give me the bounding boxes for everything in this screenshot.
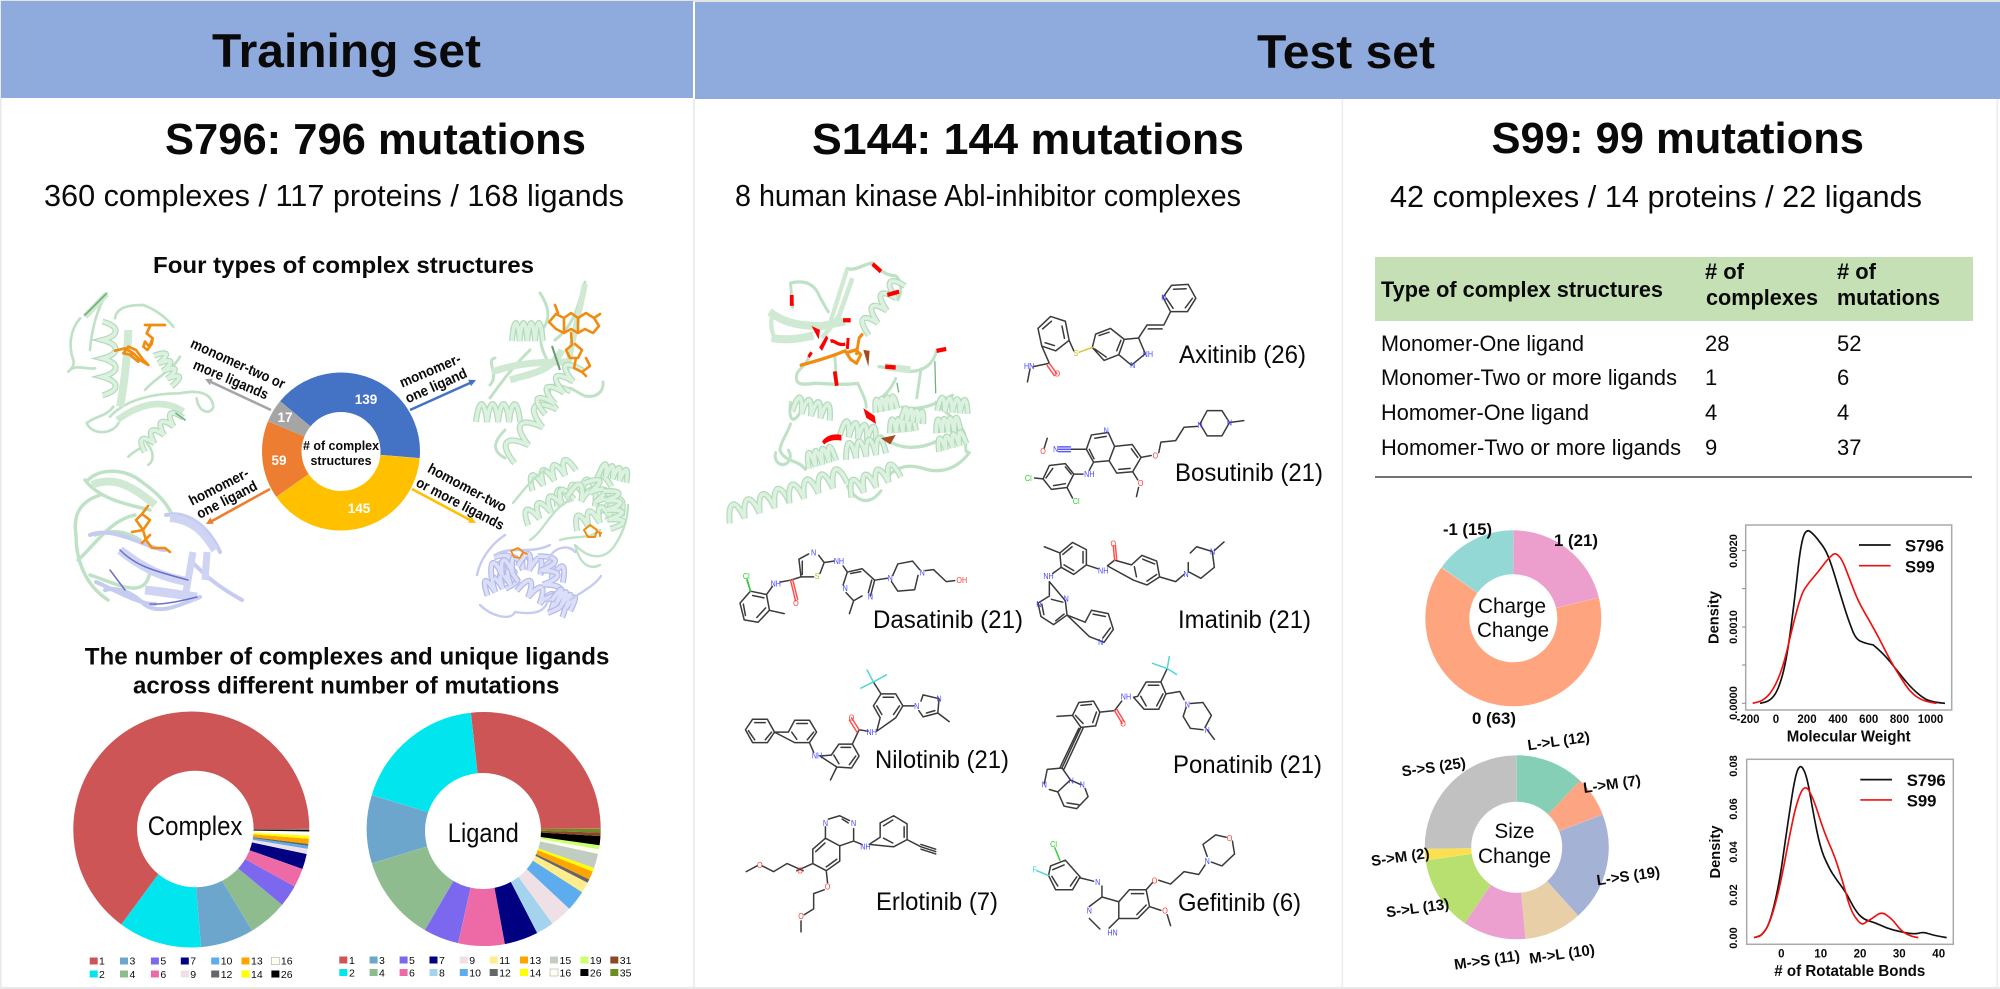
- donut chart: size change: L->S (19): [1596, 864, 1661, 889]
- legend: ligand: 8: [439, 968, 445, 980]
- molecule: Ponatinib: O: [1120, 719, 1126, 729]
- chart: rotatable bonds density: Density: [1707, 825, 1724, 878]
- heading: S796: S796: 796 mutations: [165, 116, 586, 164]
- molecule names: Nilotinib (21): [875, 746, 1009, 774]
- molecule: Axitinib: N: [1130, 361, 1135, 370]
- table: complex structure types: 4: [1837, 400, 1849, 425]
- molecule: Nilotinib: N: [914, 702, 919, 711]
- molecule: Ponatinib: N: [1069, 776, 1074, 786]
- table: complex structure types: # of: [1705, 259, 1745, 284]
- arrow: orange: [206, 489, 270, 524]
- molecule: Imatinib: N: [1064, 594, 1069, 604]
- legend: complex: [90, 956, 293, 981]
- legend: complex: 6: [160, 969, 166, 981]
- chart: rotatable bonds density: 0.00: [1728, 927, 1740, 949]
- molecule: Gefitinib: N: [1095, 878, 1100, 887]
- donut chart: size change: M->L (10): [1528, 942, 1596, 968]
- molecule: Dasatinib: N: [920, 568, 925, 578]
- molecule: Bosutinib: Cl: [1025, 473, 1032, 483]
- label: monomer-one ligand: monomer-: [397, 351, 464, 391]
- text: S796 counts: 360 complexes / 117 proteins / 168 ligands: [44, 179, 624, 213]
- molecule: Nilotinib: N: [936, 694, 942, 704]
- molecule: Imatinib: N: [1036, 600, 1041, 609]
- molecule names: [873, 341, 1323, 917]
- molecule: Bosutinib: Cl: [1073, 497, 1080, 506]
- legend: ligand: 13: [530, 955, 541, 967]
- molecule: Ponatinib: N: [1205, 726, 1210, 735]
- table: complex structure types: 28: [1705, 331, 1729, 356]
- molecule: Erlotinib: [746, 816, 936, 932]
- chart: molecular weight density: S796: [1905, 537, 1944, 556]
- table: complex structure types: 1: [1705, 365, 1717, 390]
- panel: training set S796: [44, 116, 632, 981]
- donut chart: size change: L->L (12): [1526, 729, 1591, 754]
- label: homomer-one ligand: homomer-: [187, 465, 252, 509]
- molecule: Gefitinib: O: [1227, 834, 1232, 843]
- molecule: Gefitinib: HN: [1107, 928, 1118, 938]
- chart: molecular weight density: 200: [1797, 714, 1817, 726]
- donut: number of complex structures: 59: [271, 453, 287, 468]
- donut chart: charge change: Charge: [1478, 595, 1546, 618]
- molecule: Ponatinib: NH: [1121, 692, 1131, 702]
- molecule: Bosutinib: N: [1104, 426, 1109, 436]
- chart: molecular weight density: 400: [1828, 714, 1848, 726]
- molecule: Nilotinib: NH: [867, 728, 877, 737]
- donut chart: size change: [1370, 729, 1661, 974]
- chart: molecular weight density: 800: [1890, 714, 1909, 726]
- donut chart: charge change: 0 (63): [1472, 709, 1516, 728]
- molecule: Bosutinib: O: [1138, 479, 1144, 488]
- legend: ligand: [339, 955, 632, 980]
- chart: rotatable bonds density: [1707, 755, 1953, 980]
- legend: ligand: 6: [409, 968, 415, 980]
- donut chart: complex: Complex: [148, 811, 243, 841]
- molecule: Dasatinib: N: [868, 592, 873, 601]
- header: Test set: [695, 2, 2000, 99]
- donut chart: charge change: Change: [1477, 619, 1549, 642]
- molecule names: Ponatinib (21): [1173, 751, 1322, 779]
- chart: molecular weight density: 600: [1859, 714, 1878, 726]
- text: S99 counts: 42 complexes / 14 proteins / 22 ligands: [1390, 180, 1922, 214]
- donut chart: charge change: 1 (21): [1554, 531, 1598, 550]
- molecule: Imatinib: N: [1210, 547, 1215, 557]
- chart: rotatable bonds density: 40: [1932, 948, 1945, 960]
- legend: complex: 7: [190, 956, 196, 968]
- legend: ligand: 3: [379, 955, 385, 967]
- legend: complex: 3: [130, 956, 136, 968]
- molecule names: Bosutinib (21): [1175, 459, 1323, 487]
- molecule: Dasatinib: N: [811, 548, 816, 557]
- molecule names: Imatinib (21): [1178, 606, 1311, 634]
- arrow: blue: [410, 380, 476, 410]
- donut chart: size change: Size: [1494, 820, 1534, 843]
- heading: number of complexes and unique ligands: The number of complexes and unique ligands: [85, 644, 609, 670]
- donut: number of complex structures: 145: [348, 501, 371, 516]
- table: complex structure types: 6: [1837, 365, 1849, 390]
- chart: rotatable bonds density: S99: [1907, 792, 1936, 811]
- table: complex structure types: Homomer-One ligand: [1381, 400, 1589, 425]
- legend: complex: 12: [221, 969, 233, 981]
- table: complex structure types: 9: [1705, 435, 1717, 460]
- molecule: Axitinib: N: [1161, 293, 1166, 303]
- legend: ligand: 31: [620, 955, 632, 967]
- label: monomer-two or more ligands: monomer-two or: [188, 336, 288, 393]
- chart: rotatable bonds density: 0: [1778, 948, 1785, 960]
- molecule: Erlotinib: O: [825, 882, 830, 891]
- legend: complex: 16: [281, 956, 293, 968]
- molecule: Gefitinib: O: [1162, 906, 1168, 916]
- table: complex structure types: Monomer-One ligand: [1381, 331, 1584, 356]
- molecule: Nilotinib: O: [849, 713, 854, 723]
- chart: molecular weight density: [1706, 525, 1952, 746]
- molecule: Dasatinib: O: [793, 599, 799, 608]
- legend: complex: 9: [190, 969, 196, 981]
- legend: complex: 5: [160, 956, 166, 968]
- molecule: Erlotinib: O: [757, 860, 763, 870]
- panel: test set S144: [725, 116, 1323, 938]
- molecule: Bosutinib: [1025, 411, 1244, 506]
- protein: homomer with two or more ligands: [477, 457, 630, 617]
- molecule: Axitinib: HN: [1024, 362, 1034, 371]
- legend: ligand: 10: [469, 968, 481, 980]
- donut chart: ligand: Ligand: [448, 818, 519, 848]
- molecule: Ponatinib: N: [1185, 700, 1190, 709]
- molecule: Ponatinib: [1042, 657, 1214, 809]
- molecule: Ponatinib: N: [1080, 780, 1085, 790]
- donut chart: size change: S->M (2): [1370, 845, 1431, 870]
- legend: complex: 26: [281, 969, 293, 981]
- molecule: Bosutinib: N: [1197, 420, 1203, 430]
- molecule: Imatinib: [1036, 539, 1224, 647]
- legend: ligand: 14: [530, 968, 541, 980]
- molecule: Gefitinib: N: [1087, 906, 1092, 916]
- molecule: Erlotinib: O: [798, 912, 804, 921]
- donut chart: size change: M->S (11): [1453, 948, 1521, 974]
- molecule: Imatinib: NH: [1043, 572, 1054, 581]
- molecule: Bosutinib: NH: [1084, 470, 1094, 479]
- donut chart: ligand: [401, 746, 566, 912]
- molecule: Axitinib: [1024, 284, 1196, 382]
- table: complex structure types: [1375, 257, 1973, 477]
- molecule: Dasatinib: N: [888, 574, 893, 583]
- legend: complex: 13: [251, 956, 263, 968]
- molecule: Gefitinib: N: [1205, 857, 1210, 866]
- molecule: Ponatinib: N: [1042, 780, 1047, 790]
- chart: molecular weight density: Density: [1706, 590, 1722, 644]
- chart: molecular weight density: 0.0000: [1728, 686, 1740, 720]
- arrow: gray: [205, 379, 271, 410]
- heading: four types of complex structures: Four types of complex structures: [153, 252, 534, 278]
- molecule: Imatinib: O: [1111, 539, 1116, 549]
- molecule: Dasatinib: NH: [771, 579, 781, 589]
- donut chart: size change: Change: [1478, 845, 1551, 868]
- protein: Abl kinase with mutation sites: [725, 263, 969, 523]
- legend: ligand: 26: [590, 968, 602, 980]
- donut chart: charge change: [1421, 520, 1605, 728]
- molecule: Erlotinib: NH: [860, 842, 871, 852]
- chart: molecular weight density: 0.0020: [1728, 534, 1740, 568]
- chart: rotatable bonds density: 0.02: [1728, 884, 1740, 906]
- molecule: Bosutinib: N: [1227, 418, 1232, 428]
- chart: molecular weight density: Molecular Weight: [1787, 729, 1911, 746]
- chart: rotatable bonds density: 20: [1854, 948, 1866, 960]
- protein: monomer with one ligand: [476, 282, 603, 463]
- chart: rotatable bonds density: S796: [1907, 771, 1946, 790]
- molecule: Bosutinib: O: [1153, 451, 1158, 460]
- molecule names: Erlotinib (7): [876, 888, 998, 916]
- donut: number of complex structures: 17: [277, 410, 293, 425]
- panel: test set S99: [1370, 115, 1973, 980]
- legend: ligand: 5: [409, 955, 415, 967]
- molecule: Erlotinib: N: [851, 818, 856, 828]
- molecule: Gefitinib: F: [1032, 865, 1037, 875]
- legend: complex: 4: [130, 969, 136, 981]
- legend: ligand: 35: [620, 968, 632, 980]
- molecule: Dasatinib: Cl: [743, 572, 750, 581]
- molecule: Imatinib: NH: [1098, 566, 1108, 576]
- arrow: yellow: [412, 489, 476, 523]
- molecule: Gefitinib: O: [1152, 876, 1157, 886]
- table: complex structure types: complexes: [1706, 285, 1818, 310]
- header: Test set: Test set: [1257, 25, 1435, 78]
- donut chart: size change: L->M (7): [1582, 772, 1642, 797]
- legend: ligand: 19: [590, 955, 602, 967]
- protein: monomer with two ligands: [68, 293, 213, 465]
- table: complex structure types: Homomer-Two or more ligands: [1381, 435, 1681, 460]
- molecule: Dasatinib: S: [815, 572, 819, 581]
- molecule: Axitinib: O: [1055, 369, 1060, 379]
- legend: ligand: 12: [499, 968, 511, 980]
- molecule: Erlotinib: N: [823, 818, 828, 828]
- molecule: Dasatinib: [740, 548, 967, 622]
- donut: number of complex structures: # of complex: [303, 438, 380, 453]
- donut chart: size change: S->S (25): [1401, 755, 1467, 780]
- molecule: Dasatinib: NH: [834, 557, 844, 566]
- label: monomer-two or more ligands: more ligands: [191, 357, 271, 403]
- molecule names: Gefitinib (6): [1178, 889, 1301, 917]
- header: Training set: Training set: [212, 24, 481, 77]
- molecule: Imatinib: N: [1184, 569, 1189, 579]
- molecule: Nilotinib: [745, 670, 949, 780]
- molecule names: Dasatinib (21): [873, 606, 1023, 634]
- molecule: Dasatinib: OH: [956, 576, 967, 585]
- legend: ligand: 7: [439, 955, 445, 967]
- chart: rotatable bonds density: 30: [1893, 948, 1906, 960]
- chart: molecular weight density: 0.0010: [1728, 610, 1740, 644]
- label: homomer-two or more ligands: or more ligands: [413, 475, 507, 534]
- molecule: Bosutinib: O: [1040, 447, 1046, 456]
- chart: rotatable bonds density: 0.06: [1728, 798, 1740, 820]
- chart: rotatable bonds density: 10: [1814, 948, 1827, 960]
- molecule: Axitinib: NH: [1143, 350, 1153, 359]
- molecule names: Axitinib (26): [1179, 341, 1306, 369]
- chart: molecular weight density: 1000: [1918, 714, 1943, 726]
- donut: number of complex structures: [258, 368, 424, 535]
- chart: rotatable bonds density: 0.08: [1728, 755, 1740, 777]
- heading: S99: S99: 99 mutations: [1492, 115, 1864, 163]
- table: complex structure types: Type of complex structures: [1381, 277, 1663, 302]
- table: complex structure types: 4: [1705, 400, 1717, 425]
- chart: molecular weight density: -200: [1736, 714, 1760, 726]
- legend: ligand: 16: [560, 968, 571, 980]
- heading: S144: S144: 144 mutations: [812, 116, 1244, 164]
- donut chart: complex: [108, 746, 274, 913]
- text: S144 description: 8 human kinase Abl-inhibitor complexes: [735, 179, 1241, 213]
- label: homomer-one ligand: one ligand: [194, 478, 260, 523]
- heading: number of complexes and unique ligands: across different number of mutations: [133, 672, 559, 700]
- header: Training set: [1, 1, 693, 98]
- label: homomer-two or more ligands: homomer-two: [425, 461, 509, 516]
- legend: ligand: 11: [499, 955, 510, 967]
- table: complex structure types: Monomer-Two or more ligands: [1381, 365, 1677, 390]
- donut: number of complex structures: structures: [310, 453, 372, 468]
- donut chart: charge change: -1 (15): [1443, 520, 1492, 539]
- molecule: Bosutinib: N: [1053, 445, 1058, 454]
- molecule: Dasatinib: N: [843, 584, 848, 593]
- donut chart: size change: S->L (13): [1385, 896, 1450, 921]
- table: complex structure types: 37: [1837, 435, 1861, 460]
- heading: number of complexes and unique ligands: [85, 644, 609, 700]
- molecule: Erlotinib: O: [797, 866, 803, 876]
- table: complex structure types: mutations: [1837, 285, 1940, 310]
- chart: rotatable bonds density: # of Rotatable Bonds: [1774, 963, 1925, 980]
- legend: complex: 2: [99, 969, 105, 981]
- legend: complex: 10: [221, 956, 233, 968]
- legend: ligand: 2: [349, 968, 355, 980]
- protein: homomer with one ligand: [75, 471, 242, 609]
- donut: number of complex structures: 139: [355, 392, 377, 407]
- legend: complex: 1: [99, 956, 105, 968]
- chart: rotatable bonds density: 0.04: [1728, 840, 1740, 863]
- molecule: Gefitinib: [1032, 834, 1235, 938]
- label: monomer-one ligand: one ligand: [403, 366, 470, 407]
- molecules: [740, 284, 1244, 938]
- legend: ligand: 4: [379, 968, 385, 980]
- molecule: Gefitinib: Cl: [1050, 839, 1057, 849]
- label: monomer-one ligand: [397, 351, 470, 407]
- chart: molecular weight density: S99: [1905, 557, 1935, 576]
- chart: molecular weight density: 0: [1773, 714, 1779, 726]
- molecule: Axitinib: S: [1073, 349, 1078, 358]
- legend: ligand: 9: [469, 955, 475, 967]
- molecule: Imatinib: N: [1098, 638, 1103, 647]
- table: complex structure types: # of: [1837, 259, 1877, 284]
- legend: ligand: 15: [560, 955, 571, 967]
- legend: complex: 14: [251, 969, 263, 981]
- molecule: Nilotinib: NH: [812, 751, 822, 761]
- legend: ligand: 1: [349, 955, 355, 967]
- table: complex structure types: 52: [1837, 331, 1861, 356]
